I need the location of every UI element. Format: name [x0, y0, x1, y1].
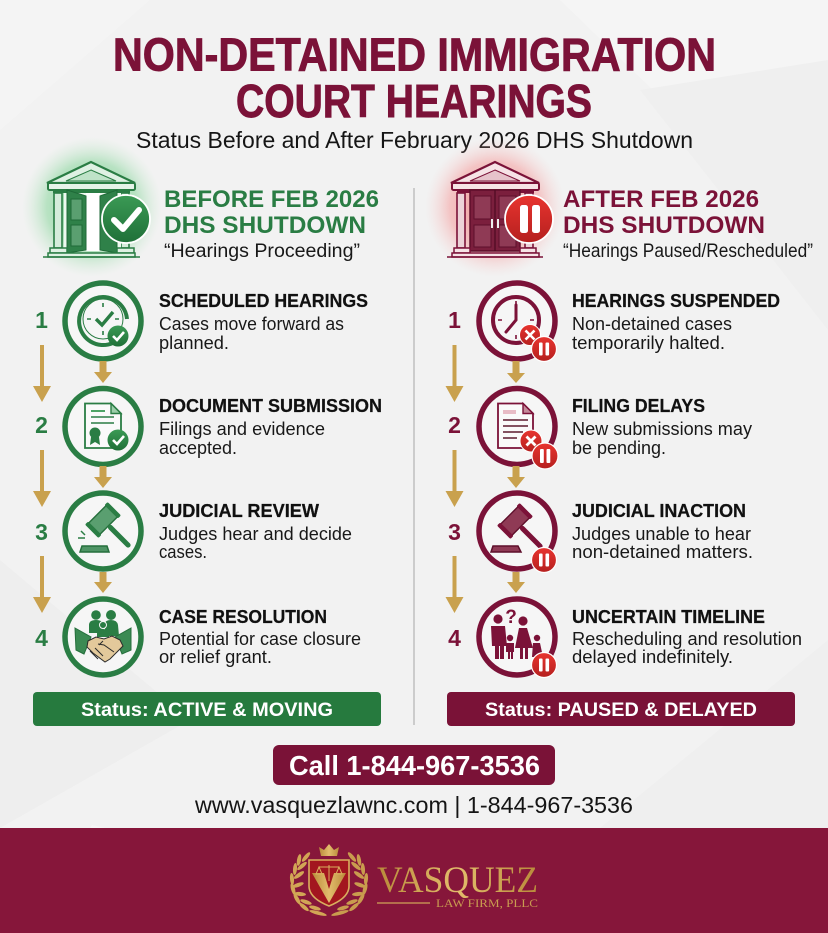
heading: after	[563, 186, 765, 239]
text: HEARINGS SUSPENDED	[572, 291, 780, 311]
title: COURT HEARINGS	[236, 75, 592, 127]
status: active and moving: Status: ACTIVE & MOVING	[81, 700, 333, 721]
monogram V	[312, 873, 346, 903]
icon: gavel	[479, 493, 556, 572]
subtitle: Status Before and After February 2026 DHS Shutdown	[136, 127, 693, 153]
scales	[316, 865, 342, 881]
arrow	[33, 556, 51, 613]
number 4: 4	[448, 625, 461, 651]
text: FILING DELAYS	[572, 396, 705, 416]
step 1: scheduled hearings: planned.	[159, 333, 229, 353]
call button: Call 1-844-967-3536	[289, 750, 540, 781]
icon: clock	[479, 283, 556, 362]
shield	[309, 860, 349, 906]
heading: after: AFTER FEB 2026	[563, 186, 759, 213]
step 4: case resolution	[35, 599, 361, 675]
number 2: 2	[35, 412, 48, 438]
arrow	[507, 572, 525, 593]
number 3: 3	[448, 519, 461, 545]
text: JUDICIAL INACTION	[572, 501, 746, 521]
step 2: filing delays: be pending.	[572, 438, 666, 458]
divider	[413, 188, 415, 725]
text: CASE RESOLUTION	[159, 607, 327, 627]
step 3: judicial review: Judges hear and decide	[159, 524, 352, 544]
step 1: hearings suspended: Non-detained cases	[572, 314, 732, 334]
step 1: scheduled hearings	[33, 283, 368, 402]
step 1: scheduled hearings: Cases move forward as	[159, 314, 344, 334]
text: JUDICIAL REVIEW	[159, 501, 319, 521]
step 2: document submission: Filings and evidence	[159, 419, 325, 439]
arrow	[33, 450, 51, 507]
arrow	[446, 450, 464, 507]
step 2: filing delays	[446, 388, 752, 507]
arrow	[507, 466, 525, 488]
panel: before shutdown	[22, 137, 382, 726]
step 3: judicial review	[33, 493, 352, 613]
laurel wreath right	[331, 851, 369, 917]
step 3: judicial inaction	[446, 493, 753, 613]
number 2: 2	[448, 412, 461, 438]
title: NON-DETAINED IMMIGRATION	[113, 28, 716, 80]
arrow	[94, 572, 112, 593]
icon: family with question mark	[479, 599, 556, 678]
heading: before: BEFORE FEB 2026	[164, 186, 379, 213]
heading: before	[164, 186, 379, 239]
arrow	[94, 466, 112, 488]
status: active and moving	[33, 692, 381, 726]
icon: handshake	[65, 599, 141, 675]
icon: closed courthouse	[425, 137, 565, 277]
arrow	[33, 345, 51, 402]
icon: family with question mark: ?	[505, 607, 517, 628]
step 2: document submission	[33, 388, 382, 507]
icon: clock	[65, 283, 141, 359]
step 4: case resolution: or relief grant.	[159, 647, 272, 667]
arrow	[94, 361, 112, 383]
number 4: 4	[35, 625, 48, 651]
step 4: case resolution: Potential for case closure	[159, 629, 361, 649]
website and phone: www.vasquezlawnc.com | 1-844-967-3536	[194, 792, 633, 818]
text: DOCUMENT SUBMISSION	[159, 396, 382, 416]
step 3: judicial inaction: Judges unable to hear	[572, 524, 751, 544]
arrow	[446, 556, 464, 613]
crown	[319, 844, 339, 856]
step 1: hearings suspended: temporarily halted.	[572, 333, 725, 353]
heading: after: DHS SHUTDOWN	[563, 212, 765, 239]
step 4: uncertain timeline: Rescheduling and resolution	[572, 629, 802, 649]
text: UNCERTAIN TIMELINE	[572, 607, 765, 627]
step 2: filing delays: New submissions may	[572, 419, 752, 439]
status: paused and delayed	[447, 692, 795, 726]
footer band	[0, 828, 828, 933]
step 3: judicial inaction: non-detained matters.	[572, 542, 753, 562]
number 3: 3	[35, 519, 48, 545]
icon: document	[65, 388, 141, 464]
step 3: judicial review: cases.	[159, 542, 207, 562]
panel: after shutdown	[425, 137, 813, 726]
text: SCHEDULED HEARINGS	[159, 291, 368, 311]
heading: before: DHS SHUTDOWN	[164, 212, 366, 239]
logo: firm name: VASQUEZ	[377, 860, 538, 901]
subheading: hearings proceeding: “Hearings Proceeding”	[164, 241, 360, 262]
step 1: hearings suspended	[446, 283, 780, 402]
arrow	[446, 345, 464, 402]
step 4: uncertain timeline: delayed indefinitely.	[572, 647, 733, 667]
step 2: document submission: accepted.	[159, 438, 237, 458]
icon: open courthouse	[22, 137, 162, 277]
icon: document	[479, 388, 558, 469]
number 1: 1	[448, 307, 461, 333]
status: paused and delayed: Status: PAUSED & DELAYED	[485, 700, 757, 721]
logo: firm name: LAW FIRM, PLLC	[436, 896, 538, 910]
icon: gavel	[65, 493, 141, 569]
arrow	[507, 361, 525, 383]
number 1: 1	[35, 307, 48, 333]
step 4: uncertain timeline	[448, 599, 802, 678]
laurel wreath left	[289, 851, 327, 917]
logo: law firm crest	[289, 844, 369, 917]
title	[113, 28, 716, 127]
